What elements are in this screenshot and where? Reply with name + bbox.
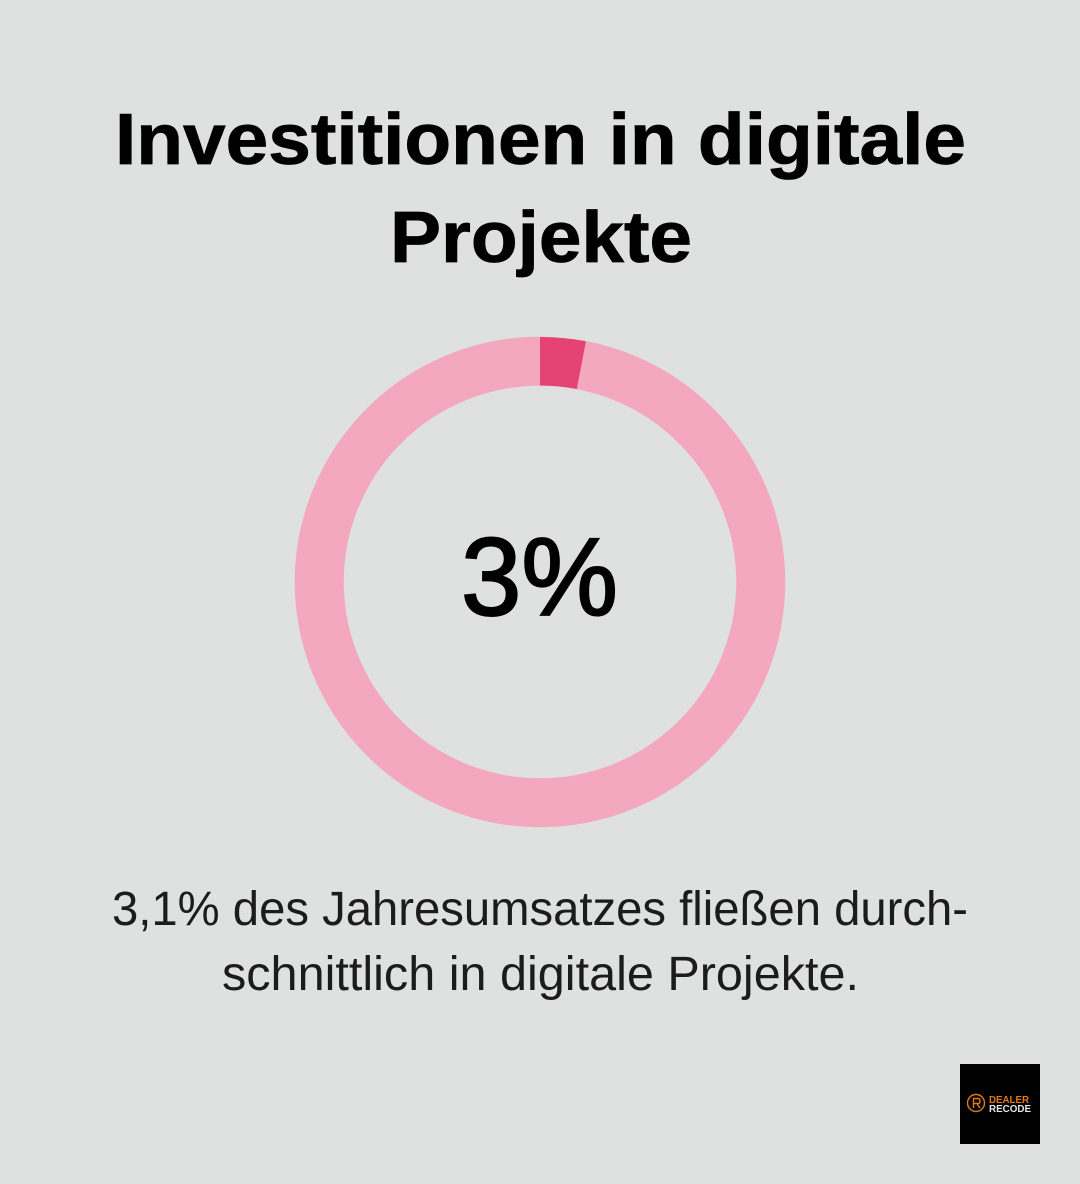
title: Investitionen in digitale	[115, 100, 966, 180]
logo wordmark	[989, 1095, 1031, 1115]
logo wordmark: DEALER	[989, 1095, 1030, 1106]
logo wordmark: RECODE	[989, 1104, 1031, 1115]
center value: 3%	[461, 516, 618, 639]
description text: 3,1% des Jahresumsatzes fließen durch-	[112, 883, 968, 936]
logo: Dealer Recode	[960, 1064, 1040, 1144]
description text: schnittlich in digitale Projekte.	[222, 948, 859, 1001]
title	[115, 100, 966, 278]
logo icon	[968, 1094, 984, 1112]
description text	[112, 883, 968, 1001]
donut highlighted segment 3%	[540, 337, 586, 389]
donut track	[319, 361, 761, 803]
donut chart	[319, 337, 761, 803]
title: Projekte	[390, 198, 692, 278]
